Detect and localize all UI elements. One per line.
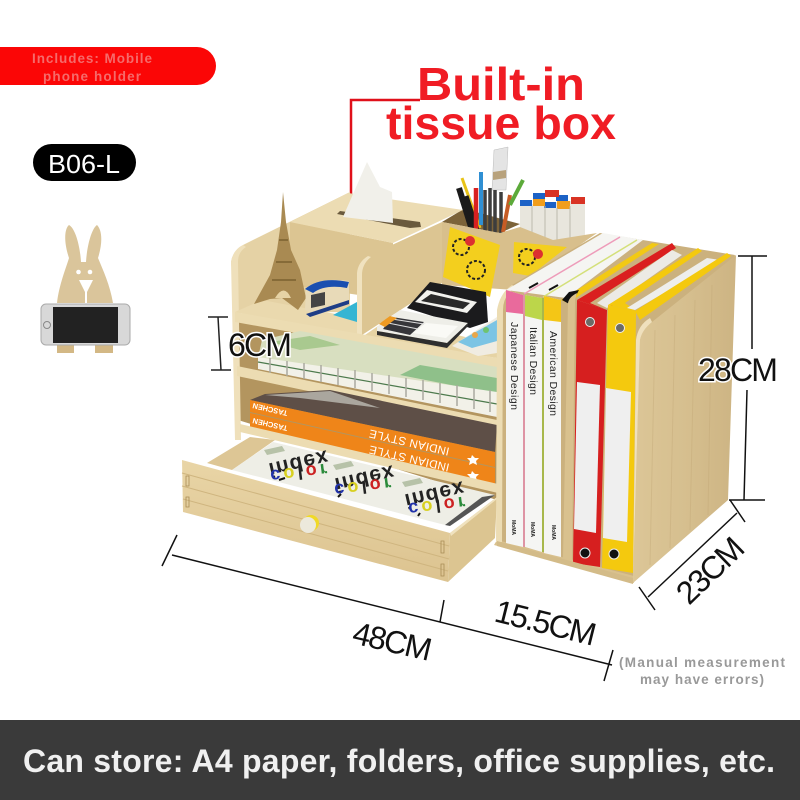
measurement note: may have errors) — [640, 672, 764, 687]
divider between books and binders — [563, 293, 577, 560]
dimension: 48CM and 15.5CM: 15.5CM — [491, 593, 598, 652]
phone — [452, 317, 497, 356]
book section front frame — [497, 233, 735, 583]
dimension: 48CM and 15.5CM — [162, 535, 613, 681]
drawer paper with index color cover: color — [269, 460, 328, 486]
drawer paper with index color cover: color — [333, 474, 392, 500]
third shelf — [240, 424, 498, 493]
dimension: 28CM — [698, 256, 776, 500]
model badge — [33, 144, 136, 181]
tissue box top — [290, 193, 463, 243]
drawer paper with index color cover: index — [403, 476, 467, 512]
blue booklet — [333, 302, 357, 322]
book: Italian Design — [524, 295, 542, 552]
book: Japanese Design: MoMA — [510, 520, 516, 535]
orange books: INDIAN STYLE — [368, 427, 451, 457]
book: Japanese Design — [506, 290, 523, 547]
dimension: 6CM: 6CM — [228, 327, 290, 363]
dimension: 23CM: 23CM — [669, 531, 750, 611]
dimension: 48CM and 15.5CM: 48CM — [349, 615, 434, 667]
book: Japanese Design: Japanese Design — [508, 322, 520, 410]
callout line to tissue box — [351, 100, 420, 210]
book: Italian Design: Italian Design — [527, 327, 539, 395]
calculator — [377, 282, 488, 348]
title: built-in tissue box — [386, 58, 616, 149]
orange books: TASCHEN — [252, 401, 288, 418]
red label: includes mobile phone holder: phone holder — [43, 69, 142, 84]
book: American Design — [543, 296, 561, 557]
compartment back wall — [238, 318, 497, 500]
book: American Design: MoMA — [550, 525, 556, 540]
drawer paper with index color cover: index — [267, 445, 331, 481]
red label: includes mobile phone holder — [0, 47, 216, 85]
orange books: INDIAN STYLE — [368, 443, 451, 473]
tissue slot — [337, 211, 421, 228]
drawer — [182, 437, 497, 582]
sticky notes — [443, 227, 567, 297]
drawer paper with index color cover — [232, 442, 495, 526]
left side panel — [231, 192, 350, 313]
red label: includes mobile phone holder: Includes: Mobile — [32, 51, 152, 66]
desk pens and ruler — [459, 147, 523, 236]
bottom banner: Can store: A4 paper, folders, office supplies, etc. — [23, 743, 775, 779]
top shelf — [235, 300, 497, 369]
title: built-in tissue box: Built-in — [417, 58, 585, 110]
markers — [520, 190, 585, 242]
dimension: 23CM — [639, 500, 750, 611]
model badge: B06-L — [48, 149, 120, 179]
orange books — [250, 390, 497, 484]
pen holder interior — [442, 210, 520, 233]
drawer paper with index color cover: color — [407, 493, 466, 519]
book tops — [506, 233, 643, 298]
organizer illustration — [182, 147, 736, 584]
tissue box front — [290, 222, 393, 300]
dimension: 28CM: 28CM — [698, 352, 776, 388]
bottom edge of book section — [497, 541, 633, 584]
book: Italian Design: MoMA — [529, 522, 535, 537]
measurement note: (Manual measurement — [619, 655, 786, 670]
right side panel — [633, 255, 736, 583]
left panel front edge — [231, 245, 246, 440]
yellow binder — [602, 248, 731, 573]
dimension: 6CM — [208, 317, 290, 370]
red binder — [573, 243, 698, 567]
measurement note — [619, 655, 786, 687]
drawer knob — [300, 515, 319, 533]
bottom banner — [0, 720, 800, 800]
second shelf — [237, 366, 497, 431]
notebook — [258, 331, 497, 417]
drawer paper with index color cover: index — [333, 460, 397, 496]
tissue — [343, 162, 393, 223]
stapler — [305, 280, 349, 317]
divider panel — [357, 222, 442, 337]
eiffel tower — [254, 192, 306, 310]
orange books: TASCHEN — [252, 416, 288, 433]
title: built-in tissue box: tissue box — [386, 97, 616, 149]
book: American Design: American Design — [547, 331, 559, 416]
pen holder wall — [442, 222, 597, 290]
icon: rabbit phone holder — [41, 225, 130, 353]
